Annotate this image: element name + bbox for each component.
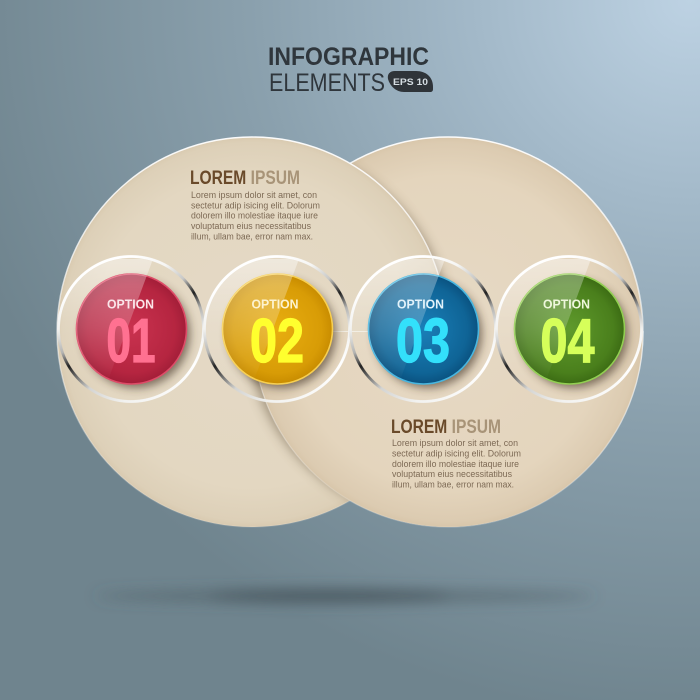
option 01	[57, 255, 204, 403]
option 03: 03	[396, 307, 450, 376]
text block: upper lorem ipsum: illum, ullam bae, error nam max.	[191, 232, 313, 242]
floor shadow	[95, 589, 595, 603]
text block: upper lorem ipsum: Lorem ipsum dolor sit amet, con	[191, 190, 317, 200]
option 02: 02	[250, 307, 304, 376]
title: ELEMENTS	[269, 69, 385, 97]
text block: lower lorem ipsum: illum, ullam bae, error nam max.	[392, 480, 514, 490]
text block: lower lorem ipsum: dolorem illo molestiae itaque iure	[392, 459, 519, 469]
option 01: OPTION	[107, 298, 154, 312]
text block: upper lorem ipsum: dolorem illo molestiae itaque iure	[191, 210, 318, 220]
title	[268, 43, 429, 97]
option 01: 01	[106, 307, 156, 376]
text block: lower lorem ipsum: voluptatum eius necessitatibus	[392, 469, 512, 479]
title: INFOGRAPHIC	[268, 43, 429, 71]
option 02	[204, 255, 350, 403]
badge: EPS 10	[388, 71, 433, 92]
text block: upper lorem ipsum	[190, 168, 320, 242]
text block: upper lorem ipsum: LOREM IPSUM	[190, 168, 300, 189]
option 04: 04	[540, 307, 595, 376]
text block: lower lorem ipsum: LOREM IPSUM	[391, 417, 501, 438]
text block: lower lorem ipsum: Lorem ipsum dolor sit amet, con	[392, 438, 518, 448]
text block: lower lorem ipsum	[391, 417, 521, 490]
backdrop: overlapping circles, title and text blocks	[56, 47, 644, 610]
text block: upper lorem ipsum: sectetur adip isicing elit. Dolorum	[191, 200, 320, 210]
badge: EPS 10: EPS 10	[393, 77, 428, 88]
option 02: OPTION	[252, 298, 298, 312]
option 03	[350, 255, 496, 403]
right circle panel	[350, 136, 644, 528]
left circle panel	[57, 137, 447, 527]
right circle lower half woven over left circle	[246, 331, 644, 528]
option 04	[496, 255, 643, 403]
text block: upper lorem ipsum: voluptatum eius necessitatibus	[191, 221, 311, 231]
option 04: OPTION	[543, 298, 590, 312]
text block: lower lorem ipsum: sectetur adip isicing elit. Dolorum	[392, 448, 521, 458]
option 03: OPTION	[397, 298, 444, 312]
